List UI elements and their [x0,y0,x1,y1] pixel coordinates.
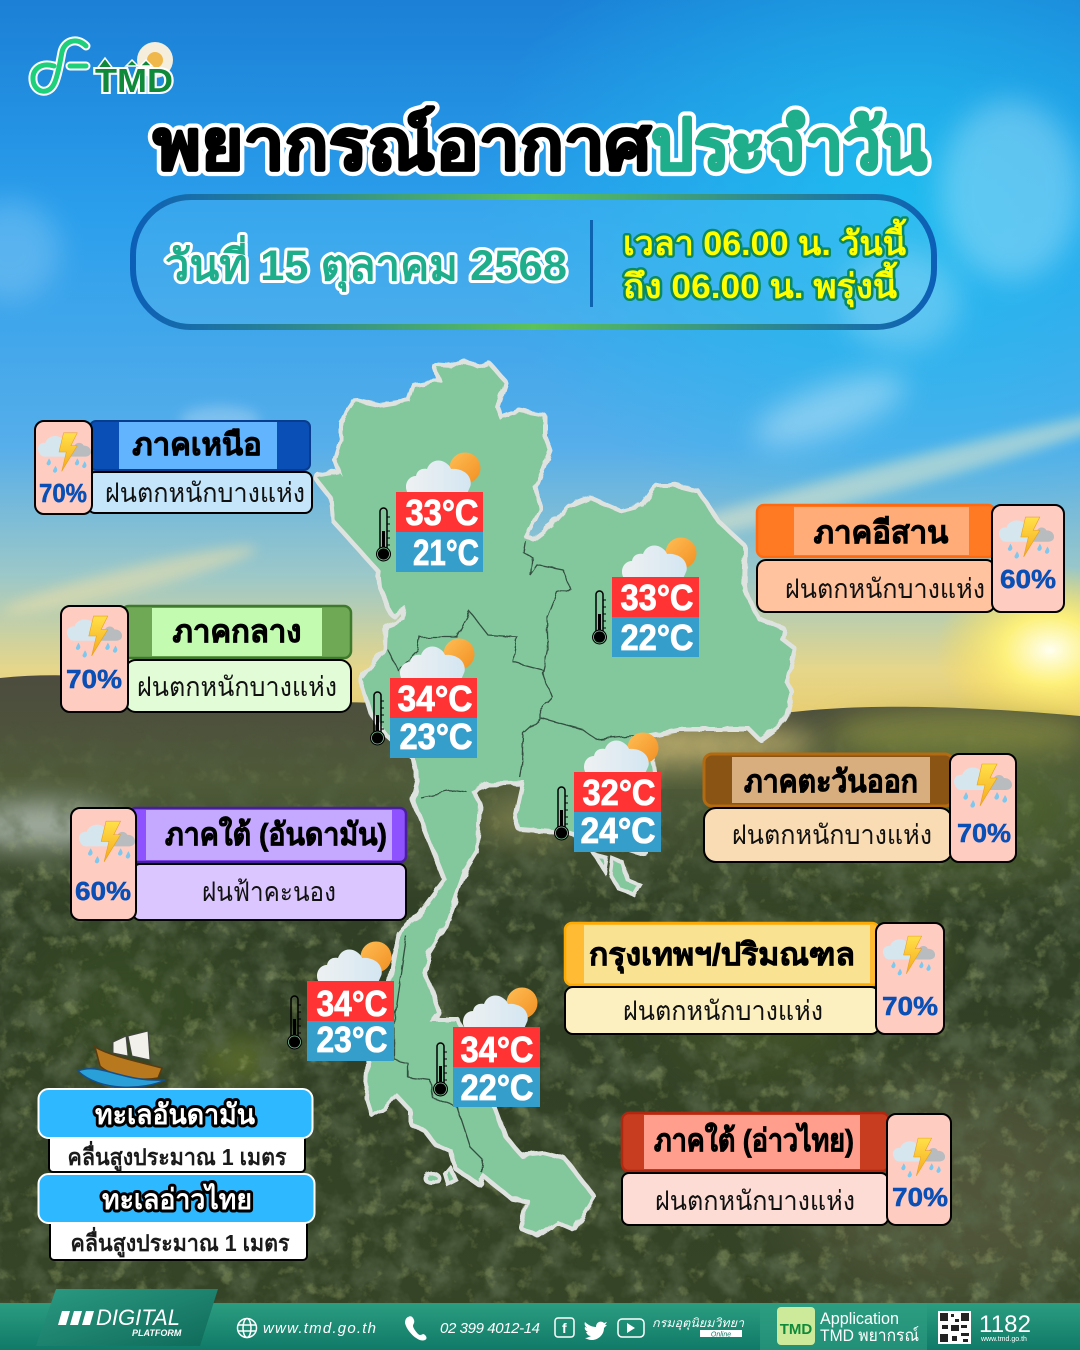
panel: central: ฝนตกหนักบางแห่ง [137,672,337,702]
panel: south gulf: 70% [892,1182,948,1212]
phone number: 02 399 4012-14 [440,1320,540,1337]
digital platform badge: PLATFORM [132,1328,182,1338]
digital platform badge: DIGITAL [96,1305,180,1330]
east temperature [554,732,661,852]
app icon: TMD [780,1321,812,1338]
panel: south andaman: 60% [75,876,131,906]
app icon [777,1307,815,1345]
valid time text [623,218,907,308]
central temperature: 23°C [400,716,473,757]
title [153,106,927,184]
panel: andaman sea: ทะเลอันดามัน [95,1099,255,1130]
icon: globe [238,1318,256,1338]
date capsule [133,197,934,327]
icon: facebook: f [562,1320,567,1336]
panel: south gulf: ภาคใต้ (อ่าวไทย) [654,1122,854,1158]
panel: south gulf: ฝนตกหนักบางแห่ง [655,1186,855,1216]
qr code [938,1311,971,1344]
gulf temperature: 34°C [460,1029,534,1070]
panel: north: 70% [39,478,87,508]
central temperature [370,638,477,758]
valid time text: ถึง 06.00 น. พรุ่งนี้ [623,261,898,308]
panel: northeast: ฝนตกหนักบางแห่ง [785,574,985,604]
central temperature: 34°C [398,678,473,719]
panel: east: 70% [957,818,1011,848]
northeast temperature: 33°C [620,577,694,618]
panel: gulf sea: ทะเลอ่าวไทย [102,1183,252,1215]
panel: south gulf [622,1113,951,1225]
panel: northeast [757,505,1064,612]
panel: andaman sea [38,1089,312,1172]
north temperature: 33°C [406,492,479,533]
icon: youtube [618,1319,644,1337]
website: www.tmd.go.th [263,1320,376,1337]
digital platform badge [36,1289,218,1346]
icon: ship [78,1031,165,1087]
application text [820,1309,919,1345]
northeast temperature [592,538,699,658]
panel: gulf sea [38,1174,314,1260]
andaman temperature: 34°C [316,983,388,1024]
application text: TMD พยากรณ์ [820,1326,919,1345]
panel: north [35,421,312,514]
valid time text: เวลา 06.00 น. วันนี้ [623,218,907,263]
panel: bangkok: กรุงเทพฯ/ปริมณฑล [589,937,855,974]
panel: andaman sea: คลื่นสูงประมาณ 1 เมตร [68,1140,287,1172]
department name [652,1316,745,1338]
northeast temperature: 22°C [620,617,694,658]
footer bar [0,1289,1080,1350]
title: ประจำวัน [651,106,927,184]
panel: south andaman [71,808,406,920]
logo: DF and TMD [33,41,173,99]
icon: twitter [585,1322,607,1340]
east temperature: 24°C [580,810,656,851]
gulf temperature [433,988,540,1108]
icon: facebook [555,1318,574,1337]
hotline 1182: www.tmd.go.th [980,1336,1027,1343]
hotline 1182: 1182 [979,1311,1031,1338]
title: ประจำวัน [651,106,927,184]
map of Thailand [317,362,793,1233]
date text: วันที่ 15 ตุลาคม 2568 [165,235,567,293]
panel: central: 70% [66,664,122,694]
title: พยากรณ์อากาศ [153,106,653,184]
panel: east: ฝนตกหนักบางแห่ง [732,820,932,850]
logo: DF and TMD: TMD [95,62,173,99]
application text: Application [820,1309,899,1328]
panel: gulf sea: คลื่นสูงประมาณ 1 เมตร [70,1226,290,1258]
andaman temperature [287,942,394,1061]
title: พยากรณ์อากาศ [153,106,653,184]
panel: south andaman: ภาคใต้ (อันดามัน) [165,816,387,852]
panel: north: ฝนตกหนักบางแห่ง [105,478,305,508]
panel: south andaman: ฝนฟ้าคะนอง [202,877,336,907]
panel: bangkok: 70% [882,991,938,1021]
panel: central: ภาคกลาง [173,614,301,649]
panel: east: ภาคตะวันออก [744,764,918,799]
gulf temperature: 22°C [460,1067,534,1108]
icon: phone [405,1316,426,1341]
panel: bangkok [565,923,944,1034]
andaman temperature: 23°C [316,1019,388,1060]
panel: northeast: 60% [1000,564,1056,594]
panel: east [704,754,1016,862]
panel: central [61,606,351,712]
panel: bangkok: ฝนตกหนักบางแห่ง [623,996,823,1026]
panel: north: ภาคเหนือ [132,427,262,462]
panel: northeast: ภาคอีสาน [814,515,948,550]
north temperature [376,452,483,573]
north temperature: 21°C [413,532,479,573]
department name: Online [711,1332,731,1338]
department name: กรมอุตุนิยมวิทยา [652,1316,745,1331]
east temperature: 32°C [582,772,656,813]
